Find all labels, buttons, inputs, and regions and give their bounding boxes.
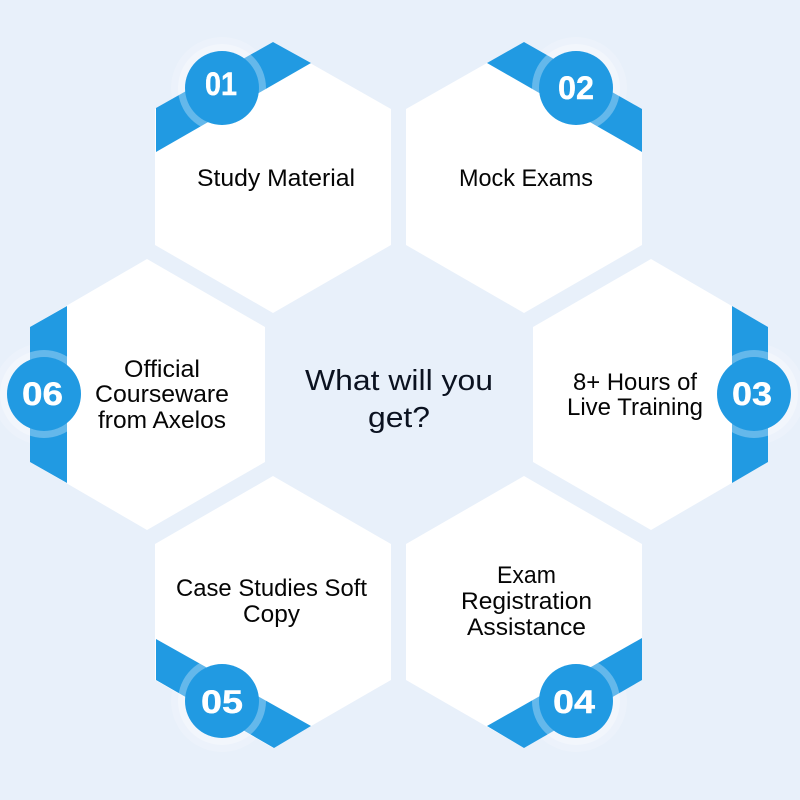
badge: 02 (532, 44, 620, 132)
band: 03 (732, 306, 768, 483)
badge: 03 (710, 350, 798, 438)
label: Exam Registration Assistance: Assistance (467, 614, 586, 641)
label: 8+ Hours of Live Training: Live Training (567, 394, 703, 421)
label: Official Courseware from Axelos (95, 356, 229, 434)
band: 05 (156, 639, 311, 748)
badge: 01: 01 (205, 66, 237, 102)
label: Official Courseware from Axelos: Courseware (95, 381, 229, 408)
band: 02 (487, 42, 642, 152)
badge: 04: 04 (553, 684, 595, 720)
badge: 05 (178, 657, 266, 745)
band: 01 (156, 42, 311, 152)
panel: 04 Exam Registration Assistance (406, 476, 642, 752)
badge: 06 (0, 350, 88, 438)
label: 8+ Hours of Live Training (567, 369, 703, 421)
label: Exam Registration Assistance (461, 562, 592, 641)
panel: 01 Study Material (155, 37, 391, 313)
panel: 06 Official Courseware from Axelos (0, 259, 265, 530)
title: What will you get? (305, 365, 493, 434)
label: Study Material: Study Material (197, 165, 355, 192)
panel: 05 Case Studies Soft Copy (155, 476, 391, 752)
label: Mock Exams: Mock Exams (459, 165, 593, 192)
label: Exam Registration Assistance: Exam (497, 562, 556, 589)
panel: 02 Mock Exams (406, 37, 642, 313)
panel: 03 Live Training (533, 259, 800, 530)
badge: 05: 05 (201, 684, 243, 720)
badge: 01 (178, 44, 266, 132)
band: 04 (487, 638, 642, 748)
title: What will you get?: get? (368, 402, 430, 434)
band: 06 (30, 306, 67, 483)
label: Official Courseware from Axelos: from Axelos (98, 407, 226, 434)
badge: 03: 03 (732, 376, 772, 412)
label: Case Studies Soft Copy: Copy (243, 601, 300, 628)
label: Case Studies Soft Copy (176, 575, 367, 628)
label: Official Courseware from Axelos: Official (124, 356, 200, 383)
title: What will you get?: What will you (305, 365, 493, 397)
badge: 06: 06 (22, 376, 63, 412)
label: Exam Registration Assistance: Registration (461, 588, 592, 615)
label: 8+ Hours of Live Training: 8+ Hours of (573, 369, 697, 396)
badge: 02: 02 (558, 70, 594, 106)
badge: 04 (532, 657, 620, 745)
label: Case Studies Soft Copy: Case Studies Soft (176, 575, 367, 602)
